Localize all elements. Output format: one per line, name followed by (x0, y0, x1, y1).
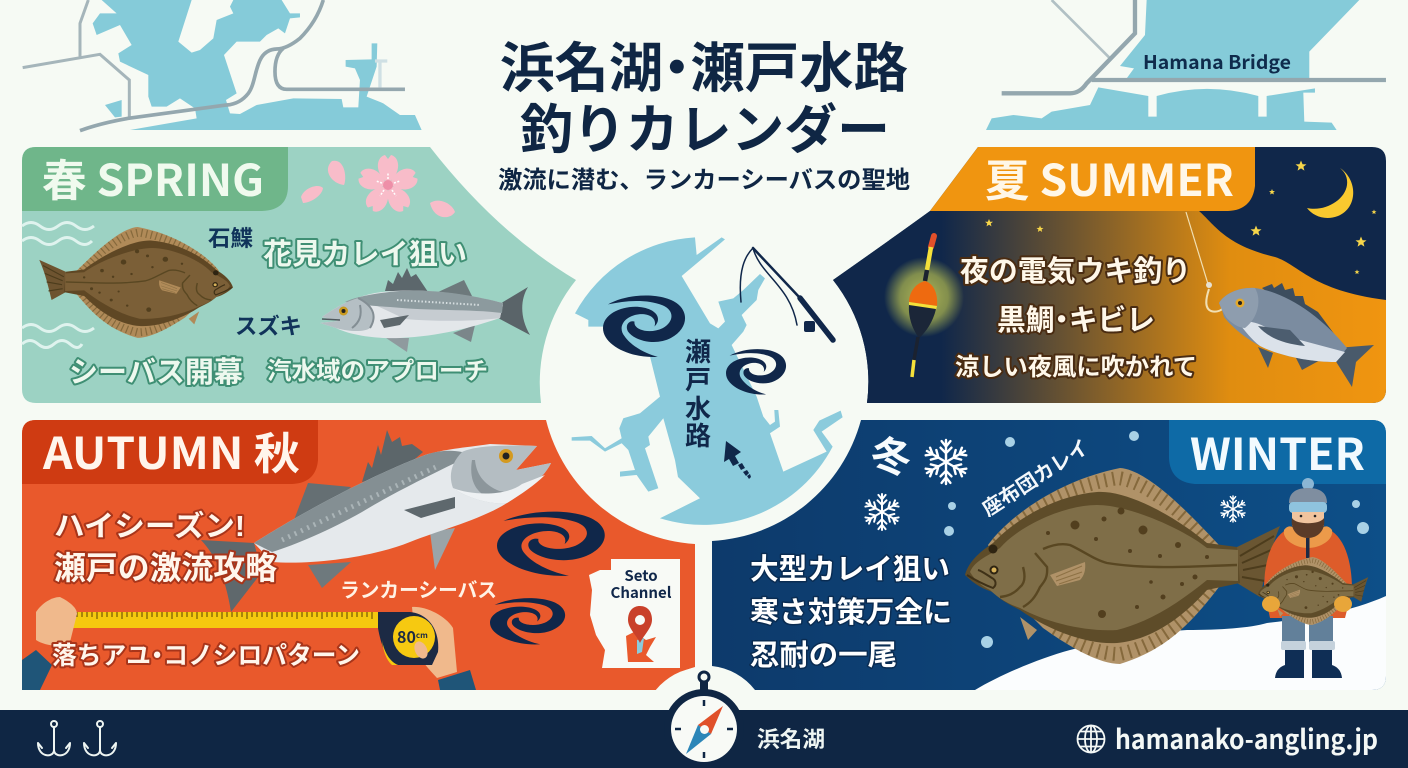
tab: spring (22, 147, 288, 211)
label: Hamana Bridge: Hamana Bridge (1143, 48, 1291, 75)
callout: brackish approach: 汽水域のアプローチ (267, 358, 488, 385)
heading: winter kanji: 冬 (867, 422, 916, 486)
tab: autumn (22, 420, 318, 484)
right hand (412, 607, 457, 678)
stars (985, 160, 1376, 274)
callout: night breeze: 涼しい夜風に吹かれて (955, 354, 1197, 381)
label: lunker: ランカーシーバス (340, 579, 497, 602)
icon: fishing rod (740, 248, 833, 340)
label: zabuton flounder: 座布団カレイ (978, 435, 1093, 521)
angler holding flounder (1258, 478, 1368, 678)
heading: winter: WINTER (1190, 419, 1365, 483)
fish: sea bass (320, 268, 530, 352)
snow ground (975, 596, 1386, 690)
callout: target species: 黒鯛・キビレ (997, 304, 1155, 337)
callout: seto rapids: 瀬戸の激流攻略 (54, 550, 277, 586)
icon: compass (664, 672, 744, 768)
waves (22, 222, 94, 348)
lake water (572, 237, 843, 525)
right sleeve (438, 670, 476, 690)
fish: lunker sea bass (201, 430, 551, 612)
tape reading: cm (416, 630, 428, 641)
small flounder held (1258, 557, 1368, 625)
callout: bait pattern: 落ちアユ・コノシロパターン (52, 642, 360, 670)
heading: autumn: AUTUMN 秋 (42, 418, 300, 482)
thumb (412, 639, 430, 661)
arrow: current direction (724, 441, 751, 479)
label: suzuki: スズキ (235, 314, 302, 339)
callout: hanami flounder: 花見カレイ狙い (263, 238, 467, 271)
panel: autumn (22, 418, 695, 690)
footer label: Hamanako: 浜名湖 (757, 727, 825, 752)
callout: big flounder: 大型カレイ狙い (750, 553, 950, 586)
compass halo (642, 667, 766, 768)
tape reading: 80 (397, 624, 416, 648)
footer bar (0, 710, 1408, 768)
fish: giant flounder (965, 468, 1280, 664)
central map circle (572, 237, 843, 525)
label: seto channel vertical: 路 (685, 421, 711, 451)
tape case (378, 612, 438, 665)
callout: cold measures: 寒さ対策万全に (750, 596, 952, 629)
map: top left lake (23, 0, 422, 131)
title (500, 39, 908, 160)
panel: winter (712, 419, 1386, 690)
label: seto channel vertical: 戸 (685, 365, 711, 395)
subtitle: 激流に潜む、ランカーシーバスの聖地 (498, 167, 910, 194)
map: top right Hamana Bridge (986, 0, 1386, 130)
panel: summer (830, 145, 1386, 403)
label: seto channel vertical: 瀬 (685, 337, 711, 367)
icon: electric float (884, 236, 964, 377)
callout: patience: 忍耐の一尾 (750, 639, 897, 672)
tab: summer (900, 147, 1255, 211)
title: 釣りカレンダー (520, 101, 890, 160)
footer url: hamanako-angling.jp (1115, 718, 1378, 757)
icon: hooks (38, 721, 116, 755)
panel: spring (22, 145, 576, 403)
swirls: channel currents (603, 295, 786, 395)
swirls: autumn currents (490, 512, 605, 644)
callout: sea bass season opens: シーバス開幕 (69, 356, 243, 389)
tab: winter (1169, 420, 1386, 484)
callout: high season: ハイシーズン! (54, 509, 245, 543)
fishing line and hook (1186, 212, 1224, 312)
fish: stone flounder (39, 227, 233, 338)
left sleeve (22, 650, 52, 690)
measuring tape (22, 597, 476, 690)
label: stone flounder: 石鰈 (208, 226, 253, 251)
inset map: Seto Channel: Seto (624, 565, 658, 586)
left hand (36, 597, 77, 646)
inset map: Seto Channel (589, 559, 680, 668)
night to dusk wave (830, 211, 1386, 403)
snowflakes (864, 440, 1246, 530)
icon: globe (1078, 726, 1104, 752)
inset map: Seto Channel: Channel (611, 582, 672, 603)
callout: night float fishing: 夜の電気ウキ釣り (960, 255, 1191, 288)
title: 浜名湖・瀬戸水路 (500, 39, 908, 99)
fish: black sea bream (1219, 283, 1374, 387)
icon: cherry blossom (301, 155, 455, 217)
heading: summer: 夏 SUMMER (985, 145, 1234, 209)
icon: crescent moon (1307, 168, 1353, 218)
label: seto channel vertical: 水 (685, 394, 711, 424)
snow dots (944, 431, 1369, 648)
heading: spring: 春 SPRING (42, 145, 264, 209)
